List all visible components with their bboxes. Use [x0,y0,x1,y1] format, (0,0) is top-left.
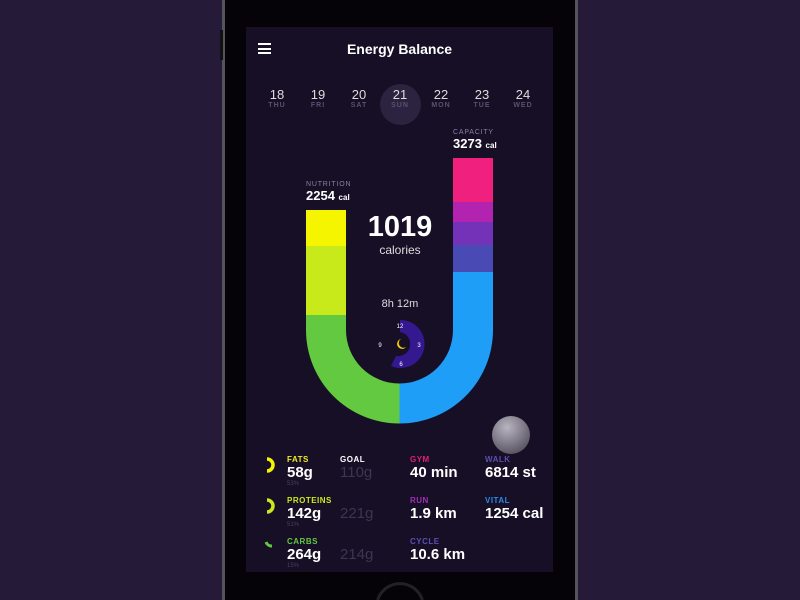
capacity arm [400,158,493,424]
sleep ring: 9 [378,343,382,349]
stats grid: 214g [340,546,373,563]
icon: proteins ring [267,498,275,514]
date selector: 24 [516,87,530,102]
stats grid: 221g [340,505,373,522]
stats grid: FATS [287,455,309,464]
stats grid: 1254 cal [485,505,543,522]
stats grid: CARBS [287,537,318,546]
date selector: 18 [270,87,284,102]
stats grid: 264g [287,546,321,563]
capacity label: CAPACITY [453,129,494,136]
center value: calories [379,243,421,257]
date selector: 23 [475,87,489,102]
nutrition label: 2254 cal [306,188,350,203]
sleep ring [378,320,425,368]
nutrition label: NUTRITION [306,181,351,188]
stats grid: PROTEINS [287,496,332,505]
title: Energy Balance [347,41,452,57]
date selector: MON [431,102,451,109]
capacity label: 3273 cal [453,136,497,151]
date selector: THU [268,102,286,109]
stats grid: GOAL [340,455,365,464]
stats grid: RUN [410,496,429,505]
stats grid: 58g [287,464,313,481]
menu icon [258,43,271,54]
capacity label [453,129,497,151]
sleep duration: 8h 12m [382,298,418,310]
date selector: 19 [311,87,325,102]
icon: fats ring [267,457,275,473]
date selector: 22 [434,87,448,102]
nutrition label [306,181,351,203]
icon: carbs ring [264,542,272,548]
stats grid: 142g [287,505,321,522]
sleep ring: 12 [397,324,404,330]
sleep ring: 6 [399,362,403,368]
date selector: WED [513,102,533,109]
stats grid: 40 min [410,464,458,481]
date selector: SAT [351,102,367,109]
sleep ring: 3 [417,343,421,349]
date selector: SUN [391,102,409,109]
date selector: 20 [352,87,366,102]
stats grid: 10.6 km [410,546,465,563]
stats grid: 6814 st [485,464,536,481]
screen [246,27,553,572]
date selector: TUE [474,102,490,109]
stats grid: 51% [287,522,299,528]
date selector: 21 [393,87,407,102]
date selector [268,84,533,125]
stats grid: CYCLE [410,537,440,546]
stats grid [264,455,543,569]
stats grid: GYM [410,455,430,464]
stats grid: VITAL [485,496,510,505]
date selector: FRI [311,102,325,109]
stats grid: 1.9 km [410,505,457,522]
center value: 1019 [368,211,432,243]
nutrition arm [306,210,400,424]
stats grid: 53% [287,481,299,487]
center value [368,211,432,257]
stats grid: 110g [340,464,372,481]
stats grid: 15% [287,563,299,569]
stats grid: WALK [485,455,511,464]
